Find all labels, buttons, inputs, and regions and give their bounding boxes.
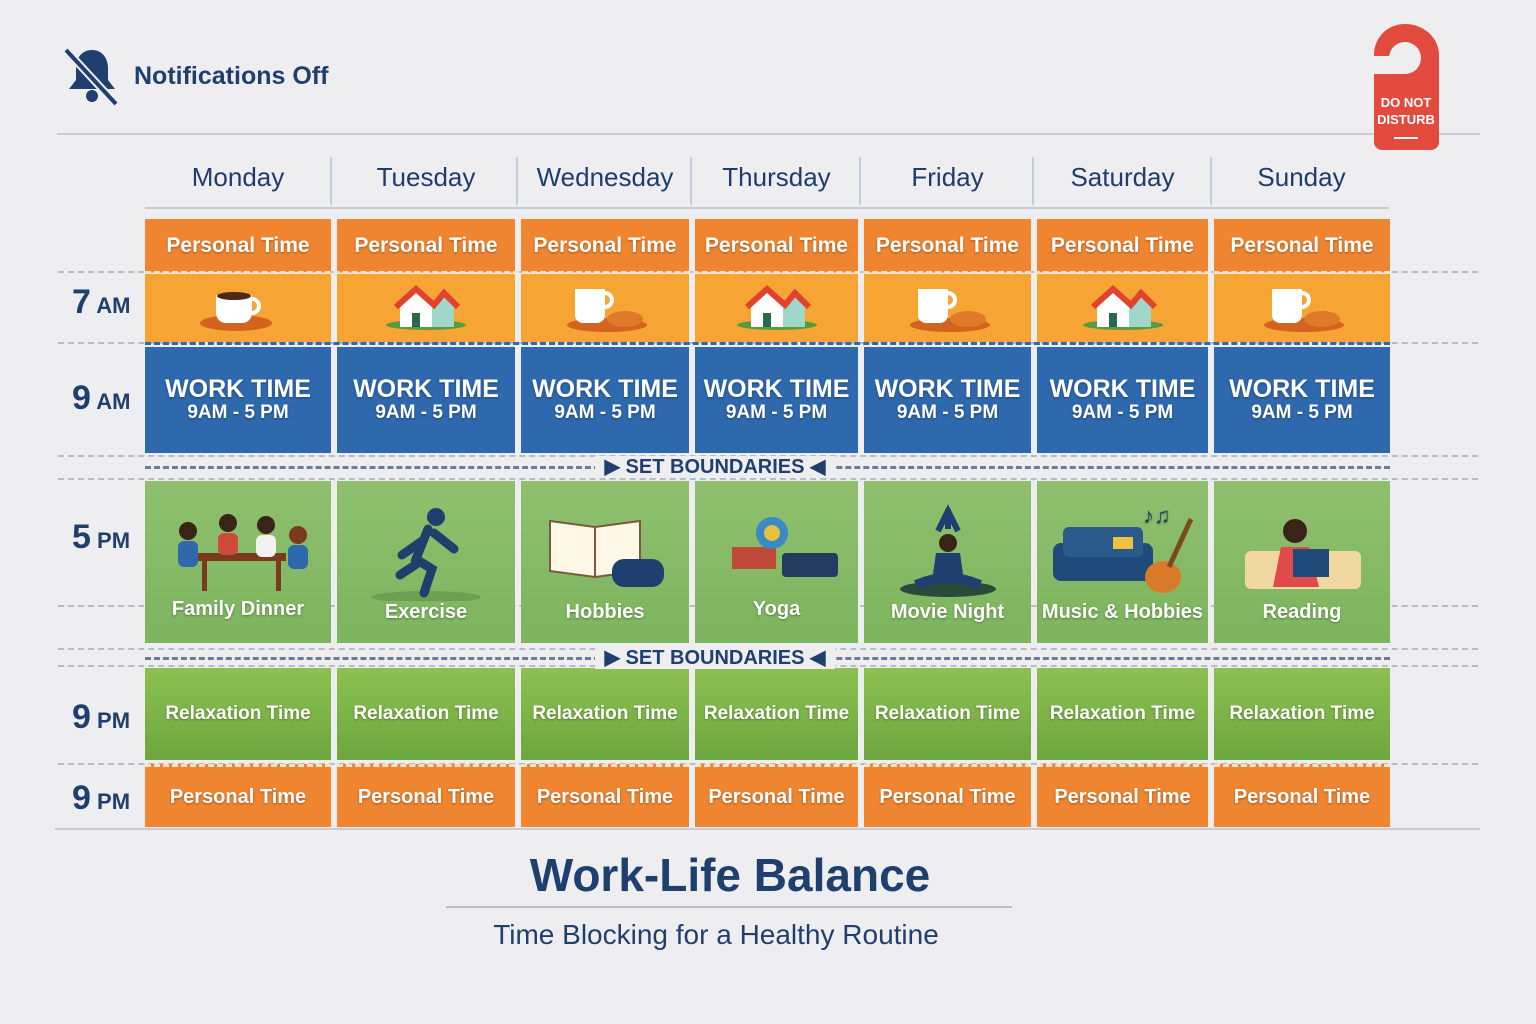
time labels: 9 AM [72,379,130,417]
row: work time: 9AM - 5 PM [897,402,998,423]
row: morning personal time: Personal Time [1230,234,1374,256]
day headers: Tuesday [377,162,475,192]
title: Work-Life Balance [530,849,930,901]
set boundaries line 1: ▶ SET BOUNDARIES ◀ [605,456,825,478]
subtitle: Time Blocking for a Healthy Routine [493,919,939,950]
row: work time [145,347,1390,453]
row: evening activities: Music & Hobbies [1042,600,1203,622]
time labels: 7 AM [72,283,130,321]
row: morning personal time: Personal Time [1051,234,1194,256]
row: work time: WORK TIME [532,375,678,403]
set boundaries line 2: ▶ SET BOUNDARIES ◀ [605,647,825,669]
day headers: Monday [192,162,284,192]
row: evening activities: Reading [1263,600,1341,622]
row: evening activities: Yoga [753,598,800,620]
row: relaxation time: Relaxation Time [165,703,311,724]
row: evening activities: Hobbies [566,600,644,622]
row: work time: WORK TIME [353,375,499,403]
decorative dashed guide lines [58,271,1478,273]
day headers: Sunday [1257,162,1346,192]
row: relaxation time: Relaxation Time [532,703,678,724]
day headers: Friday [911,162,984,192]
row: morning personal time: Personal Time [354,234,498,256]
row: work time: 9AM - 5 PM [554,402,656,423]
row: morning personal time: Personal Time [533,234,677,256]
row: work time: 9AM - 5 PM [1251,402,1353,423]
day headers: Wednesday [537,162,673,192]
row: work time: WORK TIME [165,375,311,403]
row: evening activities: ♪♫ [1142,502,1170,528]
row: work time: WORK TIME [704,375,849,403]
row: work time: 9AM - 5 PM [375,402,477,423]
row: relaxation time: Relaxation Time [704,703,849,724]
row: morning personal time: Personal Time [876,234,1019,256]
row: relaxation time: Relaxation Time [353,703,499,724]
set boundaries line 2 [145,647,1390,669]
row: evening activities [145,481,1390,643]
time labels [72,283,130,817]
label: Notifications Off [134,62,328,90]
row: work time: 9AM - 5 PM [1072,402,1173,423]
row: night personal time [145,764,1390,827]
notifications off [64,48,328,106]
row: work time: WORK TIME [875,375,1020,403]
row: relaxation time [145,668,1390,760]
icon: muted bell [64,48,118,106]
time labels: 5 PM [72,518,130,556]
row: night personal time: Personal Time [708,786,845,808]
row: work time: WORK TIME [1229,375,1375,403]
row: night personal time: Personal Time [879,786,1016,808]
row: night personal time: Personal Time [358,786,494,808]
row: work time: WORK TIME [1050,375,1195,403]
row: work time: 9AM - 5 PM [726,402,827,423]
do not disturb hanger: DO NOT [1381,95,1431,110]
schedule grid [145,219,1390,827]
row: relaxation time: Relaxation Time [1229,703,1375,724]
row: evening activities: Movie Night [891,600,1004,622]
row: relaxation time: Relaxation Time [1050,703,1195,724]
row: night personal time: Personal Time [1234,786,1370,808]
row: relaxation time: Relaxation Time [875,703,1020,724]
day headers: Saturday [1070,162,1175,192]
set boundaries line 1 [145,456,1390,478]
row: morning personal time [145,219,1390,345]
day headers [145,157,1389,209]
row: work time: 9AM - 5 PM [187,402,289,423]
row: night personal time: Personal Time [1054,786,1191,808]
time labels: 9 PM [72,698,130,736]
row: evening activities: Family Dinner [172,598,304,620]
time labels: 9 PM [72,779,130,817]
do not disturb hanger: DISTURB [1377,112,1435,127]
row: morning personal time: Personal Time [705,234,848,256]
row: night personal time: Personal Time [170,786,306,808]
row: evening activities: Exercise [385,600,467,622]
row: morning personal time: Personal Time [166,234,310,256]
row: night personal time: Personal Time [537,786,673,808]
do not disturb hanger [1374,24,1439,150]
day headers: Thursday [722,162,831,192]
